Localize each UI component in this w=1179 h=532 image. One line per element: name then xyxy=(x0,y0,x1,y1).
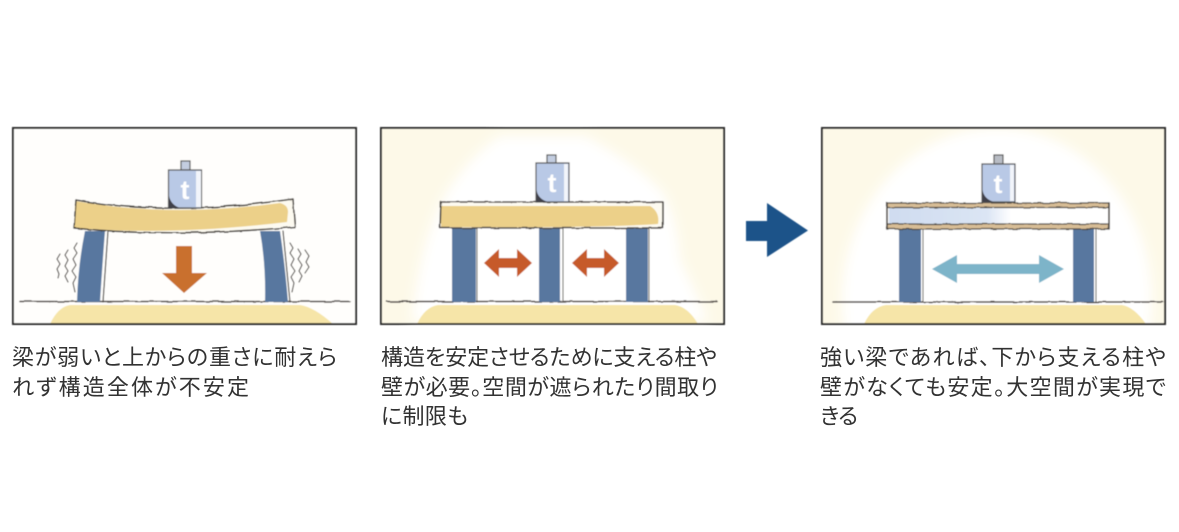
beam xyxy=(887,203,1109,229)
ground line xyxy=(833,301,1163,303)
caption: columns needed: に制限も xyxy=(381,404,468,429)
left column xyxy=(452,228,476,302)
weight highlight xyxy=(1010,165,1014,201)
beam end caps xyxy=(887,203,1109,229)
caption: strong beam xyxy=(820,345,1166,429)
beam flange top xyxy=(887,203,1109,208)
foundation mound xyxy=(50,305,333,324)
beam steel fill xyxy=(889,208,1107,224)
beam outline xyxy=(440,202,663,228)
weight letter: t xyxy=(994,169,1002,199)
weight xyxy=(168,161,202,208)
wide double arrow xyxy=(932,255,1064,283)
panel frame xyxy=(822,128,1165,324)
ground line xyxy=(20,300,350,302)
left column edge xyxy=(476,228,478,302)
caption: weak beam xyxy=(12,345,337,400)
beam xyxy=(440,202,663,228)
ground line xyxy=(387,300,717,302)
panel: weak beam xyxy=(13,128,356,324)
caption: columns needed xyxy=(381,345,718,429)
caption: strong beam: 強い梁であれば、下から支える柱や xyxy=(820,345,1166,370)
weight cap xyxy=(547,155,556,163)
weight letter: t xyxy=(548,168,556,198)
weight xyxy=(536,155,569,202)
right column xyxy=(626,228,648,302)
centre column edge xyxy=(562,228,564,302)
caption: strong beam: きる xyxy=(820,404,858,429)
beam wood fill xyxy=(74,201,288,231)
weight shadow xyxy=(536,190,548,202)
right vibration marks xyxy=(290,243,309,292)
weight shadow xyxy=(169,196,180,208)
left column xyxy=(899,229,921,302)
curved beam xyxy=(74,199,295,233)
beam outline xyxy=(74,199,295,233)
weight cap xyxy=(181,161,190,170)
foundation mound xyxy=(417,305,698,324)
white glow xyxy=(840,129,1154,324)
left column xyxy=(77,231,105,302)
caption: weak beam: れず構造全体が不安定 xyxy=(12,375,249,400)
weight highlight xyxy=(564,164,568,201)
foundation mound xyxy=(864,305,1146,324)
weight letter: t xyxy=(180,175,190,205)
right column edge xyxy=(648,228,650,302)
left vibration marks xyxy=(57,243,77,292)
weight shadow xyxy=(982,190,994,202)
right column edge xyxy=(1095,229,1097,302)
right column xyxy=(260,231,288,302)
panel frame xyxy=(13,128,356,324)
arrow: to the solution xyxy=(746,203,808,257)
weight xyxy=(982,155,1015,202)
weight body xyxy=(168,170,202,208)
weight body xyxy=(536,163,569,202)
weight cap xyxy=(994,155,1003,164)
right double arrow xyxy=(572,249,619,277)
panel frame xyxy=(381,128,724,324)
caption: columns needed: 壁が必要。空間が遮られたり間取り xyxy=(381,375,718,400)
caption: strong beam: 壁がなくても安定。大空間が実現で xyxy=(820,375,1166,400)
left column edge xyxy=(922,229,924,302)
weight highlight xyxy=(196,171,201,207)
centre column xyxy=(539,228,560,302)
caption: weak beam: 梁が弱いと上からの重さに耐えら xyxy=(12,345,337,370)
beam flange bottom xyxy=(887,224,1109,229)
left double arrow xyxy=(484,249,532,277)
right column edge xyxy=(283,231,290,302)
panel background xyxy=(381,128,724,324)
panel: columns needed xyxy=(381,128,724,324)
left column edge xyxy=(103,231,108,302)
white glow xyxy=(412,136,708,322)
beam wood fill xyxy=(441,206,658,227)
panel background xyxy=(13,128,356,324)
caption: columns needed: 構造を安定させるために支える柱や xyxy=(381,345,717,370)
panel background xyxy=(822,128,1165,324)
weight body xyxy=(982,164,1015,202)
down arrow xyxy=(162,246,207,293)
right column xyxy=(1073,229,1094,302)
panel: strong beam xyxy=(820,126,1167,326)
